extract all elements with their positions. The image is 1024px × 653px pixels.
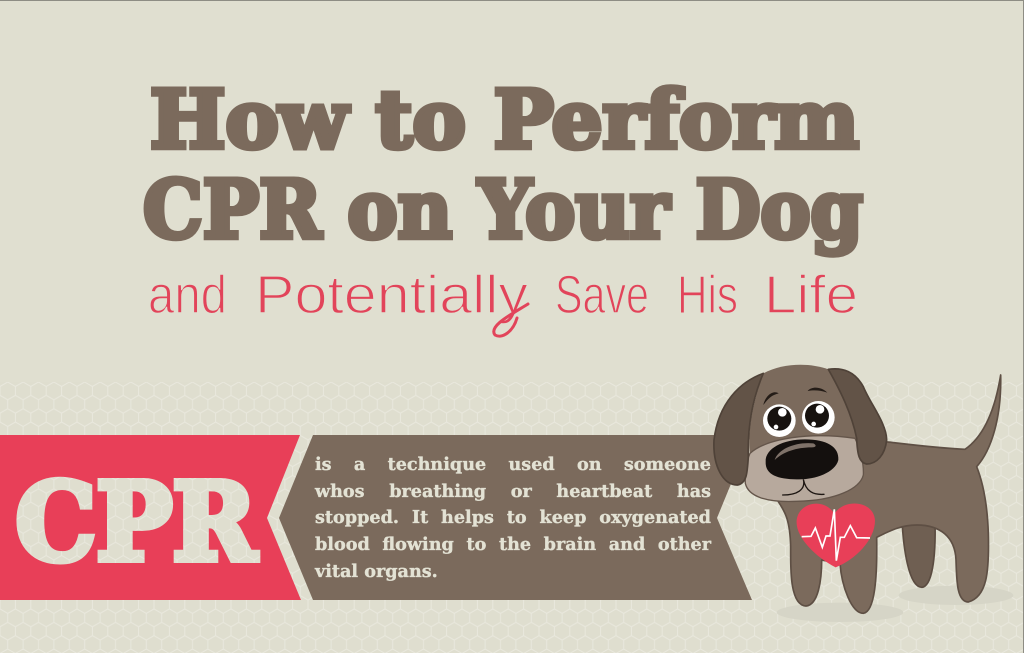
- CPR heading: CPR: [16, 460, 258, 586]
- CPR description text: [314, 454, 712, 582]
- back leg behind body: [902, 520, 935, 587]
- CPR description text: stopped. It helps to keep oxygenated: [315, 507, 711, 528]
- heartbeat line: [802, 509, 870, 561]
- CPR description text: whos breathing or heartbeat has: [315, 481, 711, 502]
- head: [749, 365, 857, 455]
- title: [143, 72, 863, 256]
- subtitle: [148, 265, 858, 325]
- red CPR banner: [0, 435, 301, 600]
- eyes: [763, 401, 835, 437]
- hexagon patterned band: [0, 382, 1024, 653]
- muzzle: [745, 436, 863, 502]
- right ear: [828, 369, 887, 464]
- title: How to Perform: [150, 72, 859, 166]
- eyebrows: [763, 388, 827, 405]
- subtitle: and: [148, 265, 227, 325]
- title: CPR on Your Dog: [143, 162, 863, 256]
- subtitle: Potentially: [255, 265, 528, 325]
- CPR description text: is a technique used on someone: [315, 454, 711, 475]
- heart: [797, 504, 875, 567]
- left ear: [714, 373, 763, 485]
- subtitle: His: [677, 265, 738, 325]
- brown description ribbon: [279, 435, 752, 600]
- ground shadows: [777, 586, 1013, 622]
- mouth: [783, 479, 824, 495]
- subtitle: Save: [555, 265, 649, 325]
- subtitle: Life: [764, 265, 858, 325]
- body, legs and tail: [778, 375, 1001, 613]
- dog illustration: [714, 365, 1013, 622]
- subtitle y loop flourish: [494, 304, 528, 336]
- nose highlight: [775, 443, 816, 460]
- CPR description text: blood flowing to the brain and other: [315, 534, 711, 555]
- nose: [766, 439, 838, 479]
- CPR description text: vital organs.: [315, 561, 438, 582]
